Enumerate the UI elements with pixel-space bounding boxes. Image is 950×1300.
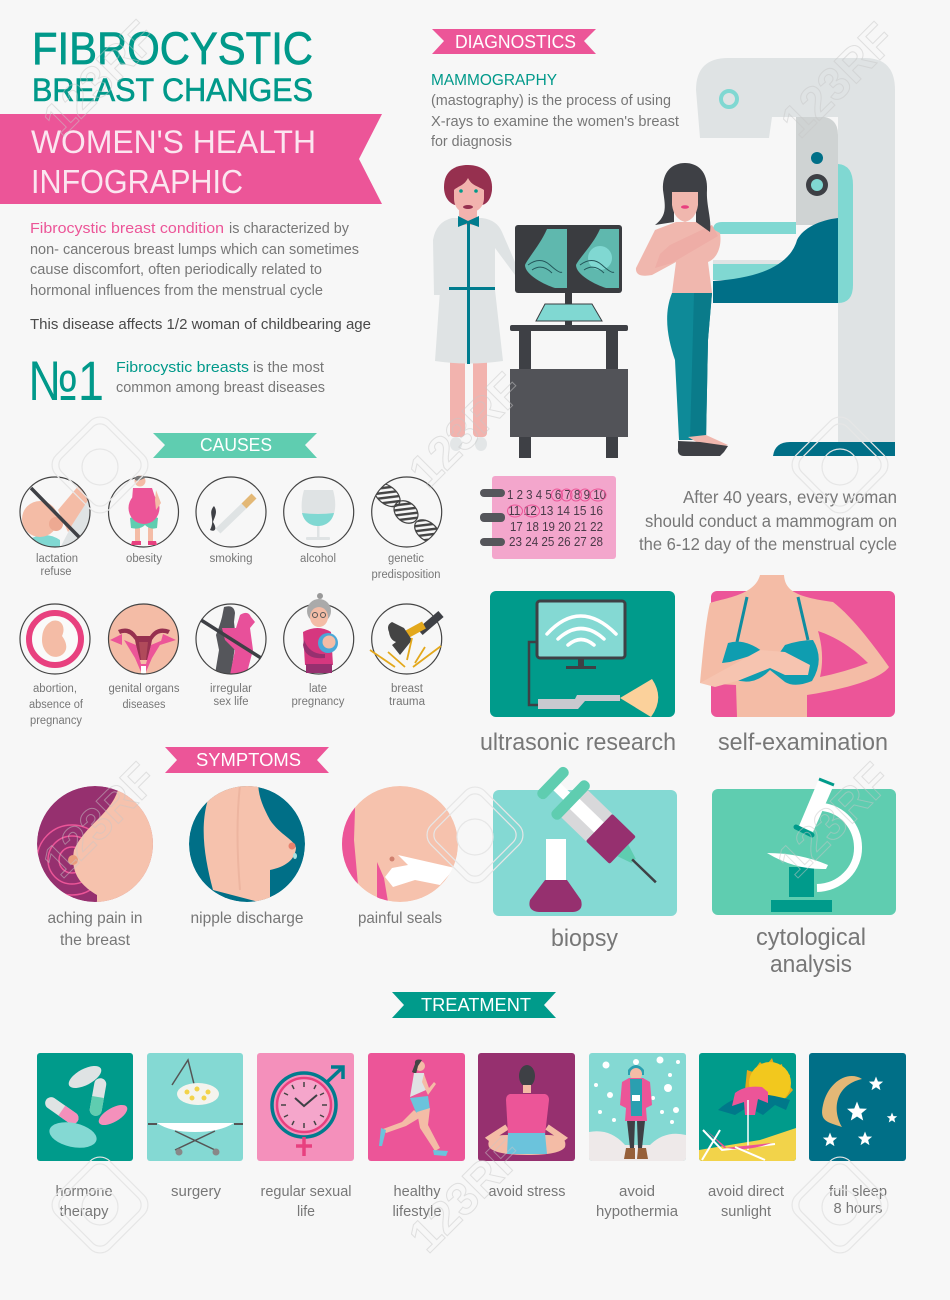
intro text block: cause discomfort, often periodically related to	[30, 262, 322, 278]
cause: smoking: smoking	[210, 553, 252, 565]
treatment: avoid stress: avoid stress	[488, 1184, 566, 1200]
cause: genital organs diseases: genital organs	[108, 683, 180, 695]
mammography machine	[696, 58, 895, 456]
treatment: avoid stress	[478, 1053, 575, 1200]
intro text block: is characterized by	[229, 221, 350, 237]
causes ribbon: CAUSES	[200, 435, 272, 455]
cause: lactation refuse: refuse	[40, 566, 72, 578]
biopsy panel: biopsy	[551, 925, 618, 952]
diagnostics ribbon: DIAGNOSTICS	[455, 32, 576, 52]
mammogram timing note	[639, 487, 897, 554]
title: FIBROCYSTIC	[32, 23, 313, 74]
cause: lactation refuse: lactation	[36, 553, 78, 565]
calendar: 17 18 19 20 21 22	[510, 520, 603, 534]
cytological analysis panel	[712, 779, 896, 978]
symptom: painful seals: painful seals	[358, 910, 442, 927]
intro text block	[30, 221, 359, 299]
mammography text: X-rays to examine the women's breast	[431, 113, 680, 130]
cause: breast trauma: trauma	[389, 696, 426, 708]
cause: genetic predisposition: genetic	[388, 553, 424, 565]
intro text block: Fibrocystic breast condition	[30, 221, 224, 237]
intro text block: hormonal influences from the menstrual cycle	[30, 283, 323, 299]
cause: alcohol	[284, 477, 354, 565]
number one callout: Fibrocystic breasts	[116, 360, 249, 376]
cause: irregular sex life: irregular	[210, 683, 252, 695]
text: 123RF	[32, 753, 167, 887]
mammogram timing note: the 6-12 day of the menstrual cycle	[639, 534, 897, 554]
treatment: hormone therapy: therapy	[60, 1204, 109, 1220]
doctor	[433, 165, 515, 451]
cause: genetic predisposition	[370, 477, 444, 581]
intro text block: non- cancerous breast lumps which can sometimes	[30, 242, 359, 258]
cytological analysis panel: analysis	[770, 951, 852, 978]
mammogram timing note: After 40 years, every woman	[683, 487, 897, 507]
cause: late pregnancy	[284, 593, 354, 708]
cause: genital organs diseases: diseases	[122, 699, 166, 711]
text: 123RF	[770, 13, 905, 147]
number one callout	[28, 349, 325, 412]
symptoms ribbon: SYMPTOMS	[196, 750, 301, 770]
cause: alcohol: alcohol	[300, 553, 336, 565]
symptom: aching pain: the breast	[60, 932, 131, 949]
number one callout: №1	[28, 349, 104, 412]
calendar	[480, 476, 616, 559]
treatment: healthy lifestyle: healthy	[394, 1184, 441, 1200]
cause: breast trauma: breast	[391, 683, 424, 695]
mammography text: (mastography) is the process of using	[431, 92, 671, 109]
symptom: aching pain	[37, 786, 153, 945]
cause: breast trauma	[370, 604, 442, 708]
title: BREAST CHANGES	[32, 72, 313, 108]
treatment: avoid direct sunlight: avoid direct	[708, 1184, 784, 1200]
monitor with x-ray images	[510, 225, 628, 458]
pink heading banner: INFOGRAPHIC	[31, 163, 243, 200]
cause: obesity	[108, 476, 178, 565]
patient	[636, 163, 728, 456]
text: 123RF	[32, 11, 167, 145]
calendar: 1 2 3 4 5 6 7 8 9 10	[507, 488, 606, 502]
mammography text: MAMMOGRAPHY	[431, 72, 557, 89]
treatment: hormone therapy	[37, 1053, 133, 1220]
text: 123RF	[398, 1128, 533, 1262]
cause: abortion: pregnancy	[30, 715, 82, 727]
calendar: 11 12 13 14 15 16	[508, 504, 603, 518]
cytological analysis panel: cytological	[756, 924, 866, 951]
pink heading banner: WOMEN'S HEALTH	[31, 124, 316, 160]
treatment: regular sexual life: regular sexual	[260, 1184, 352, 1200]
treatment: surgery: surgery	[171, 1184, 222, 1200]
cause: abortion: abortion,	[33, 683, 77, 695]
causes ribbon	[153, 433, 317, 458]
cause: irregular sex life	[196, 604, 266, 708]
cause: obesity: obesity	[126, 553, 162, 565]
pink heading banner	[0, 114, 382, 204]
symptom: aching pain: aching pain in	[48, 910, 142, 927]
symptom: nipple discharge	[189, 780, 305, 927]
symptom: nipple discharge: nipple discharge	[190, 910, 304, 927]
mammography text	[431, 72, 680, 150]
treatment: full sleep: 8 hours	[834, 1201, 882, 1217]
text: 123RF	[398, 363, 533, 497]
cause: late pregnancy: pregnancy	[292, 696, 345, 708]
symptom: painful seals	[336, 780, 458, 927]
cause: genital organs diseases	[108, 604, 180, 711]
treatment: avoid hypothermia	[589, 1053, 686, 1220]
treatment: avoid direct sunlight: sunlight	[721, 1204, 771, 1220]
ultrasonic research panel: ultrasonic research	[480, 729, 676, 756]
cause: smoking	[196, 477, 266, 565]
mammography text: for diagnosis	[431, 133, 512, 150]
treatment: hormone therapy: hormone	[56, 1184, 112, 1200]
calendar: 23 24 25 26 27 28	[509, 535, 603, 549]
cause: abortion	[20, 604, 90, 727]
treatment: regular sexual life: life	[297, 1204, 315, 1220]
number one callout: common among breast diseases	[116, 380, 325, 396]
cause: lactation refuse	[20, 477, 94, 578]
symptoms ribbon	[165, 747, 329, 773]
cause: irregular sex life: sex life	[214, 696, 248, 708]
biopsy panel	[493, 761, 677, 952]
cause: genetic predisposition: predisposition	[372, 569, 440, 581]
cause: abortion: absence of	[29, 699, 84, 711]
treatment: avoid hypothermia: hypothermia	[596, 1204, 679, 1220]
self-examination panel: self-examination	[718, 729, 888, 756]
self-examination panel	[700, 575, 895, 756]
ultrasonic research panel	[480, 591, 676, 756]
treatment: surgery	[147, 1053, 243, 1200]
treatment: healthy lifestyle: lifestyle	[392, 1204, 442, 1220]
treatment: avoid direct sunlight	[699, 1053, 796, 1220]
number one callout: is the most	[253, 360, 324, 376]
treatment: regular sexual life	[257, 1053, 354, 1220]
cause: late pregnancy: late	[309, 683, 327, 695]
treatment ribbon	[392, 992, 556, 1018]
title	[32, 23, 313, 108]
treatment: full sleep: full sleep	[829, 1184, 887, 1200]
treatment: full sleep	[809, 1053, 906, 1217]
treatment: avoid hypothermia: avoid	[619, 1184, 655, 1200]
statistic line: This disease affects 1/2 woman of childbearing age	[30, 317, 371, 333]
treatment ribbon: TREATMENT	[421, 995, 531, 1015]
diagnostics ribbon	[432, 29, 596, 54]
treatment: healthy lifestyle	[368, 1053, 465, 1220]
mammogram timing note: should conduct a mammogram on	[645, 511, 897, 531]
text: 123RF	[766, 753, 901, 887]
